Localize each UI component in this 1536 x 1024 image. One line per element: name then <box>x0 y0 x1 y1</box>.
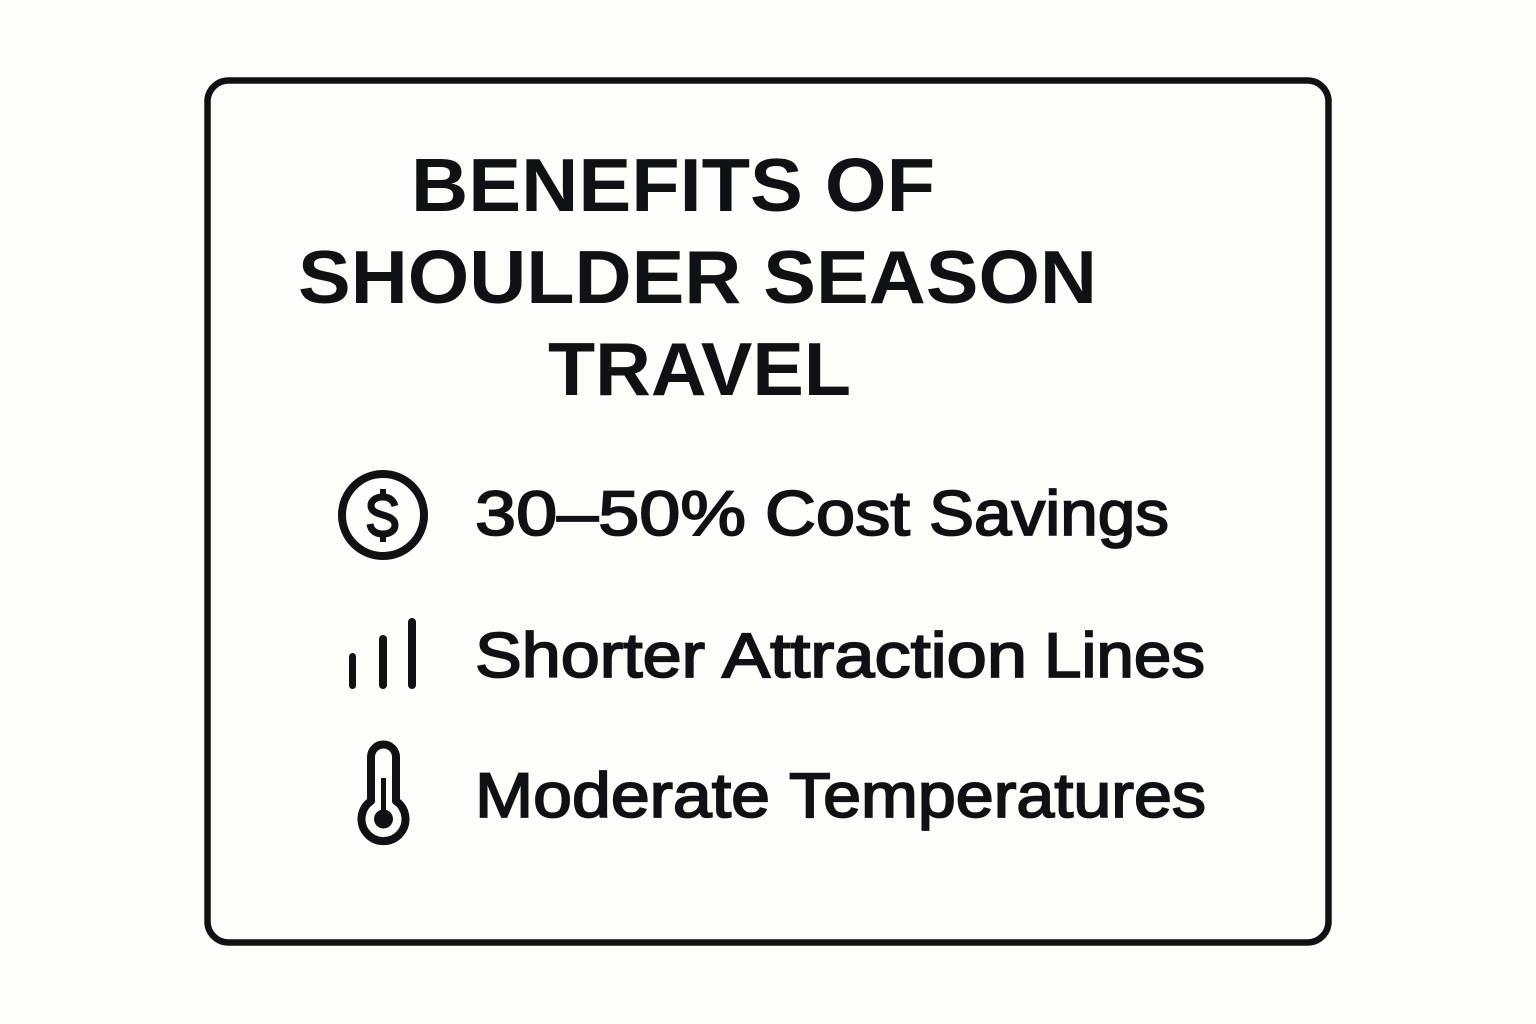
title: BENEFITS OF <box>411 143 935 227</box>
title: TRAVEL <box>548 327 851 411</box>
benefit: cost savings <box>342 474 1169 556</box>
text: shorter lines: Shorter <box>475 621 705 691</box>
panel: benefits card <box>208 80 1328 942</box>
text: cost savings <box>475 479 1169 549</box>
text: temperatures: Moderate <box>475 761 770 831</box>
text: temperatures: Temperatures <box>789 761 1206 831</box>
icon: thermometer <box>362 744 406 841</box>
text: temperatures <box>475 761 1206 831</box>
icon: dollar coin <box>342 474 424 556</box>
text: shorter lines: Attraction <box>722 621 1027 691</box>
text: cost savings: 30–50% <box>475 479 746 549</box>
text: shorter lines <box>475 621 1205 691</box>
benefit: shorter lines <box>349 618 1205 691</box>
title <box>298 143 1097 411</box>
icon: ascending bars <box>349 618 416 689</box>
text: cost savings: Savings <box>929 479 1169 549</box>
text: cost savings: Cost <box>765 479 911 549</box>
text: shorter lines: Lines <box>1044 621 1205 691</box>
title: SHOULDER SEASON <box>298 235 1097 319</box>
benefit: temperatures <box>362 744 1206 841</box>
